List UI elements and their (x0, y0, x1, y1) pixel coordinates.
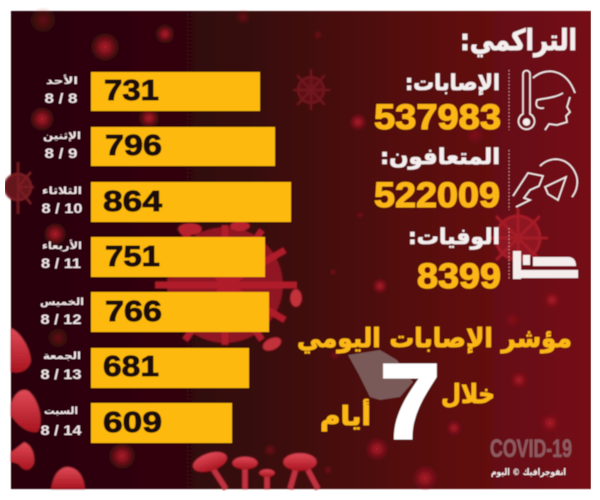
background: large virus behind bars (155, 221, 302, 354)
label: Friday: الجمعة (43, 351, 81, 362)
icon: head with thermometer (518, 71, 575, 130)
label: Friday (40, 351, 82, 382)
heading: daily infections index: مؤشر الإصابات اليومي (297, 324, 572, 354)
dotted dividers (508, 70, 510, 280)
label: Wednesday: الأربعاء (42, 239, 82, 252)
bar: Monday 796: 796 (105, 130, 162, 162)
stat: deaths: الوفيات: (408, 225, 500, 250)
label: Monday: 8 / 9 (44, 145, 78, 161)
number: 7: 7 (380, 343, 440, 461)
label: Saturday (40, 406, 82, 438)
icon: person with mask and thermometer gun (513, 159, 577, 207)
bar: Thursday 766 (91, 292, 269, 332)
stat: recovered (374, 145, 500, 215)
text: days: أيام (320, 399, 371, 432)
bar: Tuesday 864: 864 (103, 186, 162, 218)
text: during: خلال (441, 380, 495, 410)
stat: recovered: المتعافون: (380, 145, 500, 170)
label: Thursday: الخميس (40, 297, 84, 308)
label: Friday: 8 / 13 (40, 366, 82, 382)
bar: Sunday 731: 731 (104, 75, 159, 107)
stat: infections: الإصابات: (405, 71, 500, 96)
label: Thursday: 8 / 12 (40, 311, 82, 327)
bar: Saturday 609: 609 (103, 407, 162, 439)
label: Tuesday: الثلاثاء (42, 186, 82, 197)
label: Sunday (44, 74, 78, 106)
label: Tuesday: 8 / 10 (42, 200, 83, 216)
heading: cumulative: التراكمي: (460, 23, 577, 57)
label: Wednesday: 8 / 11 (41, 255, 81, 271)
background: mushroom virus spikes bottom (190, 448, 318, 489)
bar: Thursday 766: 766 (105, 296, 162, 328)
day labels (40, 74, 84, 438)
label: Monday (43, 131, 81, 161)
stat: deaths: 8399 (417, 257, 501, 296)
bar: Saturday 609 (91, 403, 232, 443)
bar: Wednesday 751 (91, 237, 265, 277)
label: Tuesday (42, 186, 83, 216)
label: Wednesday (41, 239, 82, 271)
bar: Friday 681: 681 (103, 351, 159, 383)
stat: deaths (408, 225, 501, 296)
label: Thursday (40, 297, 84, 327)
bar: Sunday 731 (91, 72, 260, 111)
bar: Friday 681 (91, 348, 249, 388)
bar: Tuesday 864 (91, 182, 291, 222)
background: mushroom virus spikes left (11, 328, 85, 489)
background: virus on right (490, 208, 548, 266)
bar: Monday 796 (91, 127, 275, 166)
background: virus near top center (293, 69, 330, 110)
credit line: انفوجرافيك © اليوم (491, 468, 566, 478)
background: virus on left edge (5, 162, 34, 214)
icon: hospital bed (513, 251, 578, 279)
bar: Wednesday 751: 751 (105, 241, 160, 273)
label: Saturday: 8 / 14 (40, 422, 82, 438)
stat: infections (374, 71, 501, 137)
bar chart: daily infections (91, 72, 291, 443)
label: Monday: الإثنين (43, 131, 81, 142)
stat: recovered: 522009 (374, 176, 500, 215)
label: Sunday: الأحد (46, 74, 78, 87)
label: Sunday: 8 / 8 (44, 90, 78, 106)
label: Saturday: السبت (44, 406, 78, 417)
stat: infections: 537983 (374, 98, 501, 137)
map: Saudi Arabia silhouette (348, 350, 413, 400)
